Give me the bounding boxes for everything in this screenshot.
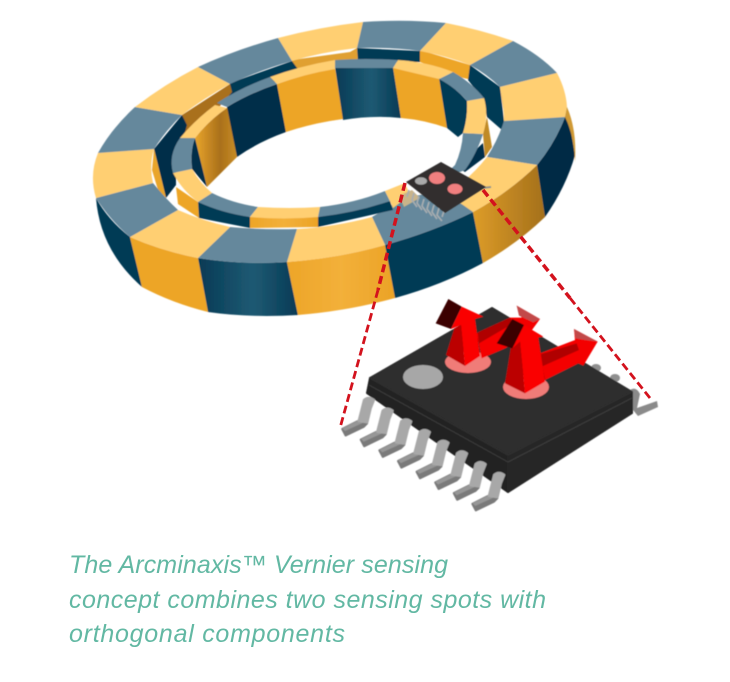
inner ring walls <box>176 67 492 228</box>
small chip body <box>406 162 486 213</box>
right side pins <box>591 364 658 416</box>
sensing spot 1 <box>445 351 491 373</box>
caption: concept combines two sensing spots with <box>69 586 546 614</box>
red field arrows <box>436 299 598 393</box>
caption <box>69 551 546 648</box>
magnetic ring assembly <box>93 21 575 316</box>
sensing spot 2 <box>503 375 549 399</box>
outer ring side wall <box>96 107 575 316</box>
small chip shadow smudge <box>399 190 420 207</box>
small chip sensing spot 2 <box>448 184 462 194</box>
dashed projection line right <box>483 190 650 398</box>
small chip sensing spot 1 <box>429 172 445 184</box>
large sensor chip <box>342 299 658 510</box>
small sensor chip on ring <box>399 162 491 221</box>
small chip pins <box>407 187 491 221</box>
caption: orthogonal components <box>69 620 345 648</box>
dashed projection line left <box>340 183 405 428</box>
arrow pair 1 <box>436 299 540 366</box>
outer ring inner wall <box>152 48 505 198</box>
arrow pair 2 <box>497 319 598 393</box>
small chip marker dot <box>415 177 427 185</box>
chip left side pins <box>342 398 504 510</box>
outer ring top face <box>93 21 567 263</box>
chip marker dot <box>403 365 443 389</box>
chip body <box>367 308 632 492</box>
inner ring top face <box>172 59 486 218</box>
caption: The Arcminaxis™ Vernier sensing <box>69 551 448 579</box>
